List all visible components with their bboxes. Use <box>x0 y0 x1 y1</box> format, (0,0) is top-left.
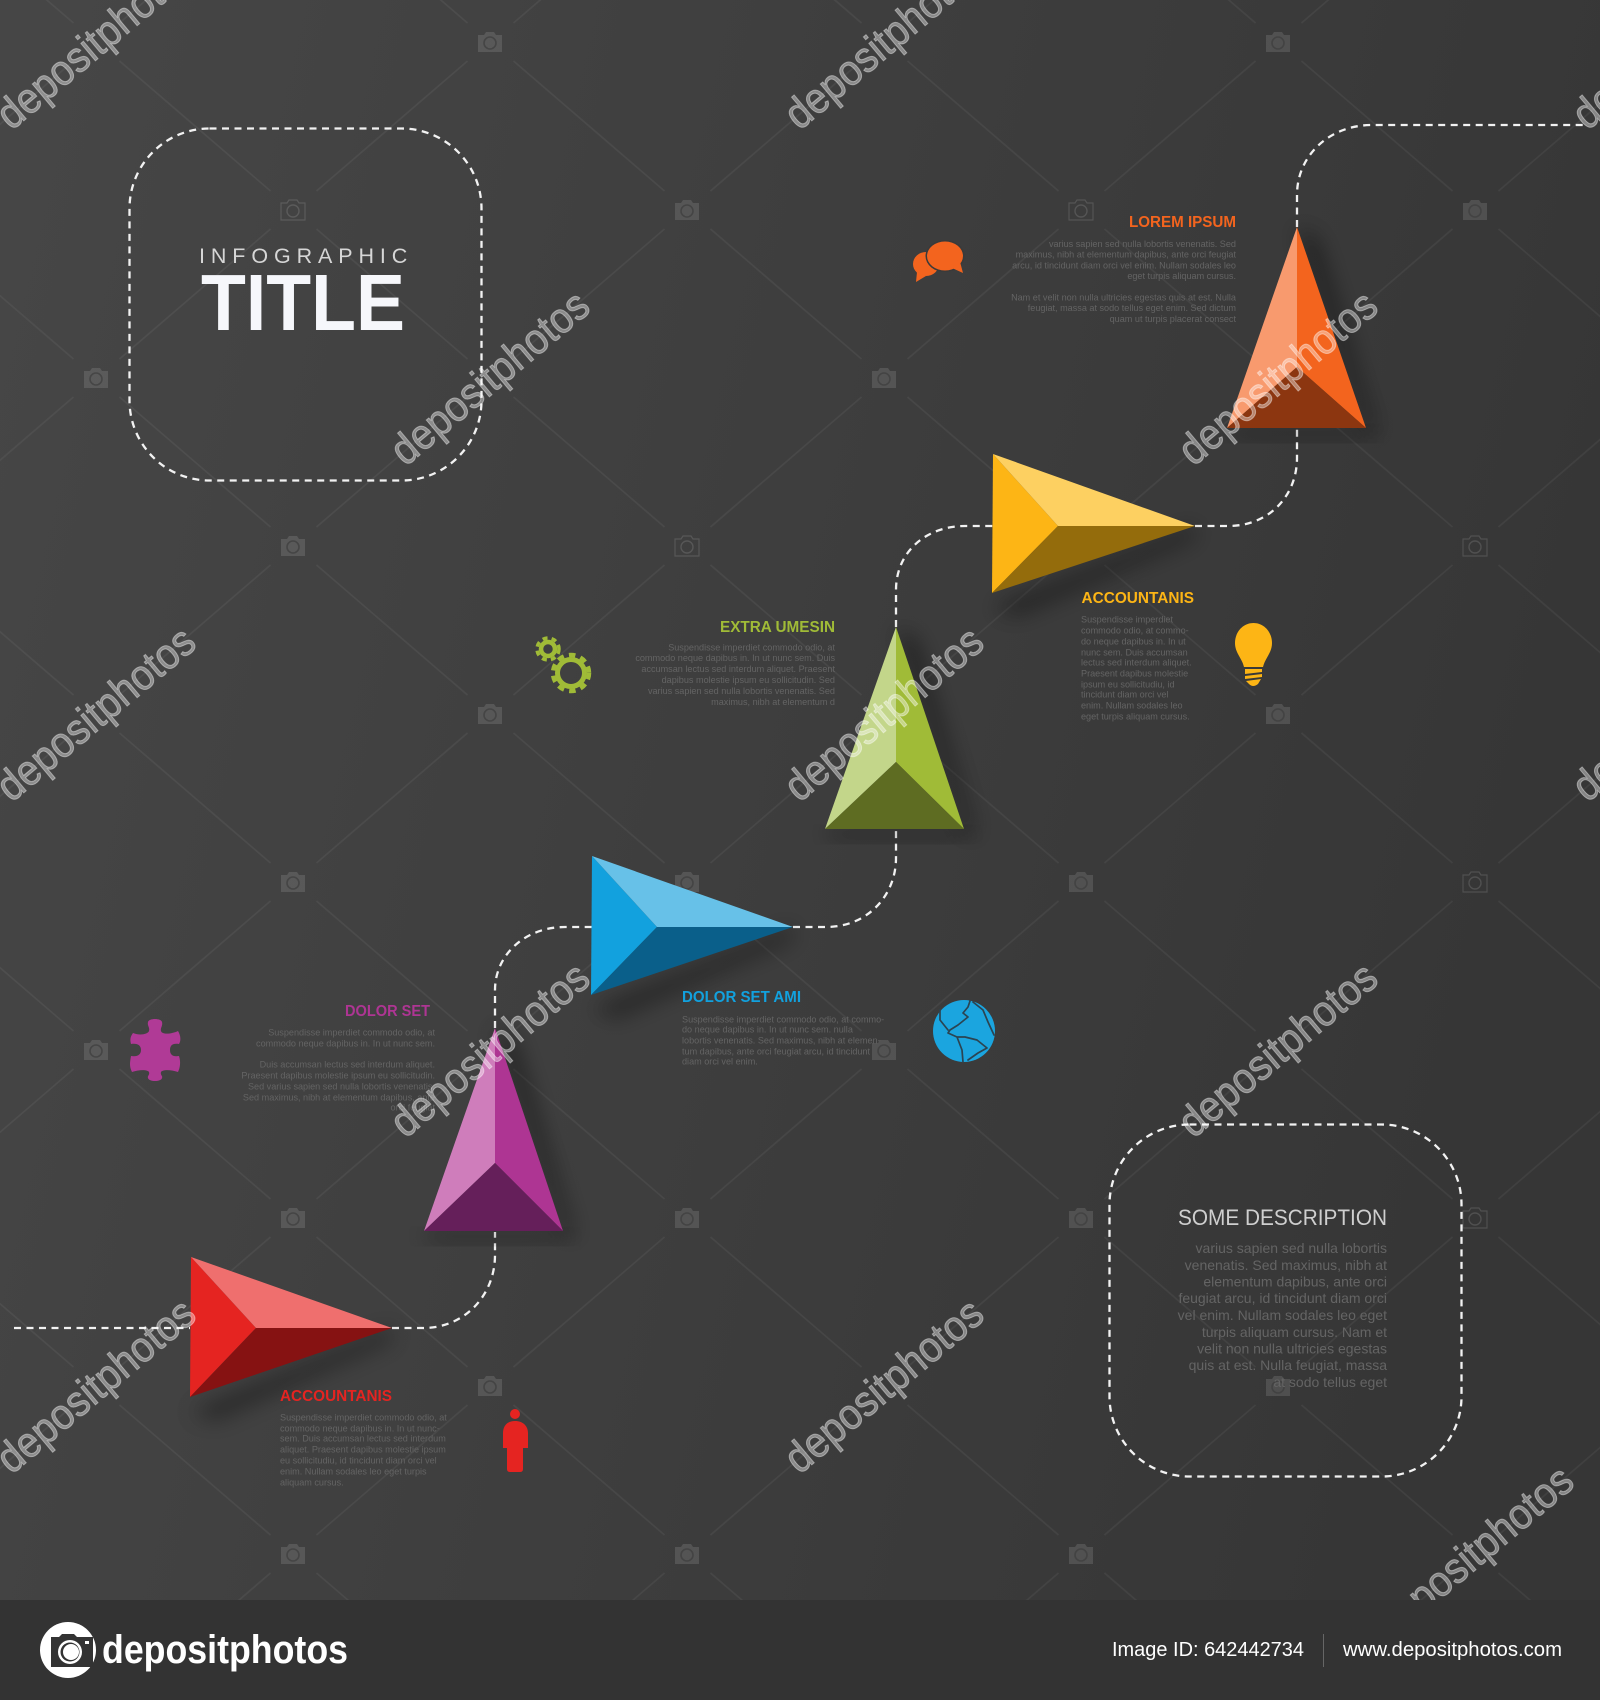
panel: description box <box>1110 1124 1462 1476</box>
body text: Sed maximus, nibh at elementum dapibus, ante <box>243 1092 435 1102</box>
body text: enim. Nullam sodales leo <box>1081 700 1183 710</box>
watermark camera marks <box>84 32 1487 1564</box>
step: accountanis yellow <box>1081 590 1194 722</box>
icon: gears <box>537 638 589 691</box>
body text: Praesent dapibus molestie <box>1081 668 1188 678</box>
body text: sem. Duis accumsan lectus sed interdum <box>280 1434 446 1444</box>
watermark text: depositphotos <box>775 1289 993 1483</box>
step: dolor set ami <box>682 989 884 1066</box>
image id: Image ID: 642442734 <box>1112 1639 1304 1661</box>
body text: eu sollicitudiu, id tincidunt diam orci vel <box>280 1456 437 1466</box>
icon: puzzle piece <box>130 1019 180 1081</box>
watermark text: depositphotos <box>775 617 993 811</box>
description text: turpis aliquam cursus. Nam et <box>1202 1324 1387 1340</box>
panel: title box <box>130 128 482 480</box>
body text: Nam et velit non nulla ultricies egestas quis at est. Nulla <box>1011 292 1237 302</box>
icon: person <box>503 1409 528 1472</box>
body text: varius sapien sed nulla lobortis venenatis. Sed <box>1049 239 1236 249</box>
body text: Suspendisse imperdiet commodo odio, at <box>668 642 835 652</box>
body text: arcu, id tincidunt diam orci vel enim. Nullam sodales leo <box>1012 260 1236 270</box>
body text: commodo neque dapibus in. In ut nunc sem. <box>256 1038 435 1048</box>
step: lorem ipsum <box>1011 214 1237 324</box>
body text: do neque dapibus in. In ut nunc sem. nulla <box>682 1024 854 1034</box>
body text: aliquet. Praesent dapibus molestie ipsum <box>280 1444 446 1454</box>
step: accountanis red <box>280 1388 447 1488</box>
body text: dapibus molestie ipsum eu sollicitudin. Sed <box>662 675 835 685</box>
body text: varius sapien sed nulla lobortis venenatis. Sed <box>648 686 835 696</box>
body text: do neque dapibus in. In ut <box>1081 636 1186 646</box>
body text: maximus, nibh at elementum d <box>711 697 835 707</box>
body text: diam orci vel enim. <box>682 1056 758 1066</box>
body text: Sed varius sapien sed nulla lobortis venenatis. <box>248 1082 435 1092</box>
step: dolor set <box>241 1003 435 1112</box>
footer logo wordmark: depositphotos <box>102 1628 348 1672</box>
description text: vel enim. Nullam sodales leo eget <box>1178 1307 1387 1323</box>
heading: DOLOR SET <box>345 1003 430 1020</box>
arrow 4: green <box>825 627 976 840</box>
body text: accumsan lectus sed interdum aliquet. Praesent <box>641 664 835 674</box>
description heading: SOME DESCRIPTION <box>1178 1205 1387 1230</box>
body text: aliquam cursus. <box>280 1478 344 1488</box>
description text: varius sapien sed nulla lobortis <box>1196 1240 1387 1256</box>
body text: commodo neque dapibus in. In ut nunc sem. Duis <box>635 653 835 663</box>
arrow 5: yellow <box>992 454 1195 616</box>
heading: ACCOUNTANIS <box>280 1388 392 1405</box>
body text: Suspendisse imperdiet commodo odio, at <box>280 1412 447 1422</box>
watermark text: depositphotos <box>1365 1456 1583 1650</box>
title: TITLE <box>201 258 405 347</box>
arrow 3: blue <box>591 856 793 1018</box>
body text: Suspendisse imperdiet commodo odio, at <box>268 1028 435 1038</box>
footer logo icon <box>40 1622 96 1678</box>
description text: feugiat arcu, id tincidunt diam orci <box>1178 1290 1387 1306</box>
body text: lectus sed interdum aliquet. <box>1081 658 1192 668</box>
body text: ipsum eu sollicitudiu, id <box>1081 680 1175 690</box>
footer bar <box>0 1600 1600 1700</box>
body text: commodo odio, at commo- <box>1081 626 1189 636</box>
body text: Praesent dapibus molestie ipsum eu sollicitudin. <box>241 1070 435 1080</box>
watermark text: depositphotos <box>381 281 599 475</box>
body text: Suspendisse imperdiet <box>1081 614 1173 624</box>
description text: quis at est. Nulla feugiat, massa <box>1189 1357 1387 1373</box>
arrow 2: purple <box>424 1028 575 1242</box>
body text: eget turpis aliquam cursus. <box>1127 271 1236 281</box>
icon: speech bubbles <box>913 240 964 282</box>
arrow 6: orange <box>1227 227 1378 439</box>
watermark text: depositphotos <box>1169 953 1387 1147</box>
body text: enim. Nullam sodales leo eget turpis <box>280 1466 427 1476</box>
body text: commodo neque dapibus in. In ut nunc- <box>280 1424 440 1434</box>
body text: Suspendisse imperdiet commodo odio, at commo- <box>682 1014 884 1024</box>
arrow 1: red <box>190 1257 392 1420</box>
title kicker: INFOGRAPHIC <box>199 244 413 268</box>
body text: Duis accumsan lectus sed interdum aliquet. <box>260 1060 435 1070</box>
heading: LOREM IPSUM <box>1129 214 1236 231</box>
watermark text: depositphotos <box>381 953 599 1147</box>
description text: elementum dapibus, ante orci <box>1203 1274 1387 1290</box>
body text: tincidunt diam orci vel <box>1081 690 1168 700</box>
heading: ACCOUNTANIS <box>1082 590 1194 607</box>
step: extra umesin <box>635 619 835 707</box>
icon: globe <box>933 1000 995 1062</box>
body text: eget turpis aliquam cursus. <box>1081 712 1190 722</box>
body text: feugiat, massa at sodo tellus eget enim. Sed dictum <box>1028 303 1236 313</box>
body text: orci feugiat <box>391 1102 435 1112</box>
description text: velit non nulla ultricies egestas <box>1197 1340 1387 1356</box>
body text: nunc sem. Duis accumsan <box>1081 648 1188 658</box>
heading: DOLOR SET AMI <box>682 989 801 1006</box>
heading: EXTRA UMESIN <box>720 619 835 636</box>
dashed connector path <box>14 125 1584 1328</box>
body text: maximus, nibh at elementum dapibus, ante orci feugiat <box>1016 250 1236 260</box>
description text: venenatis. Sed maximus, nibh at <box>1185 1257 1387 1273</box>
icon: light bulb <box>1235 623 1272 686</box>
body text: quam ut turpis placerat consect <box>1110 314 1236 324</box>
site url: www.depositphotos.com <box>1342 1639 1562 1661</box>
description text: at sodo tellus eget <box>1273 1374 1387 1390</box>
body text: lobortis venenatis. Sed maximus, nibh at elemen- <box>682 1036 881 1046</box>
watermark text: depositphotos <box>1169 281 1387 475</box>
body text: tum dapibus, ante orci feugiat arcu, id tincidunt <box>682 1046 871 1056</box>
